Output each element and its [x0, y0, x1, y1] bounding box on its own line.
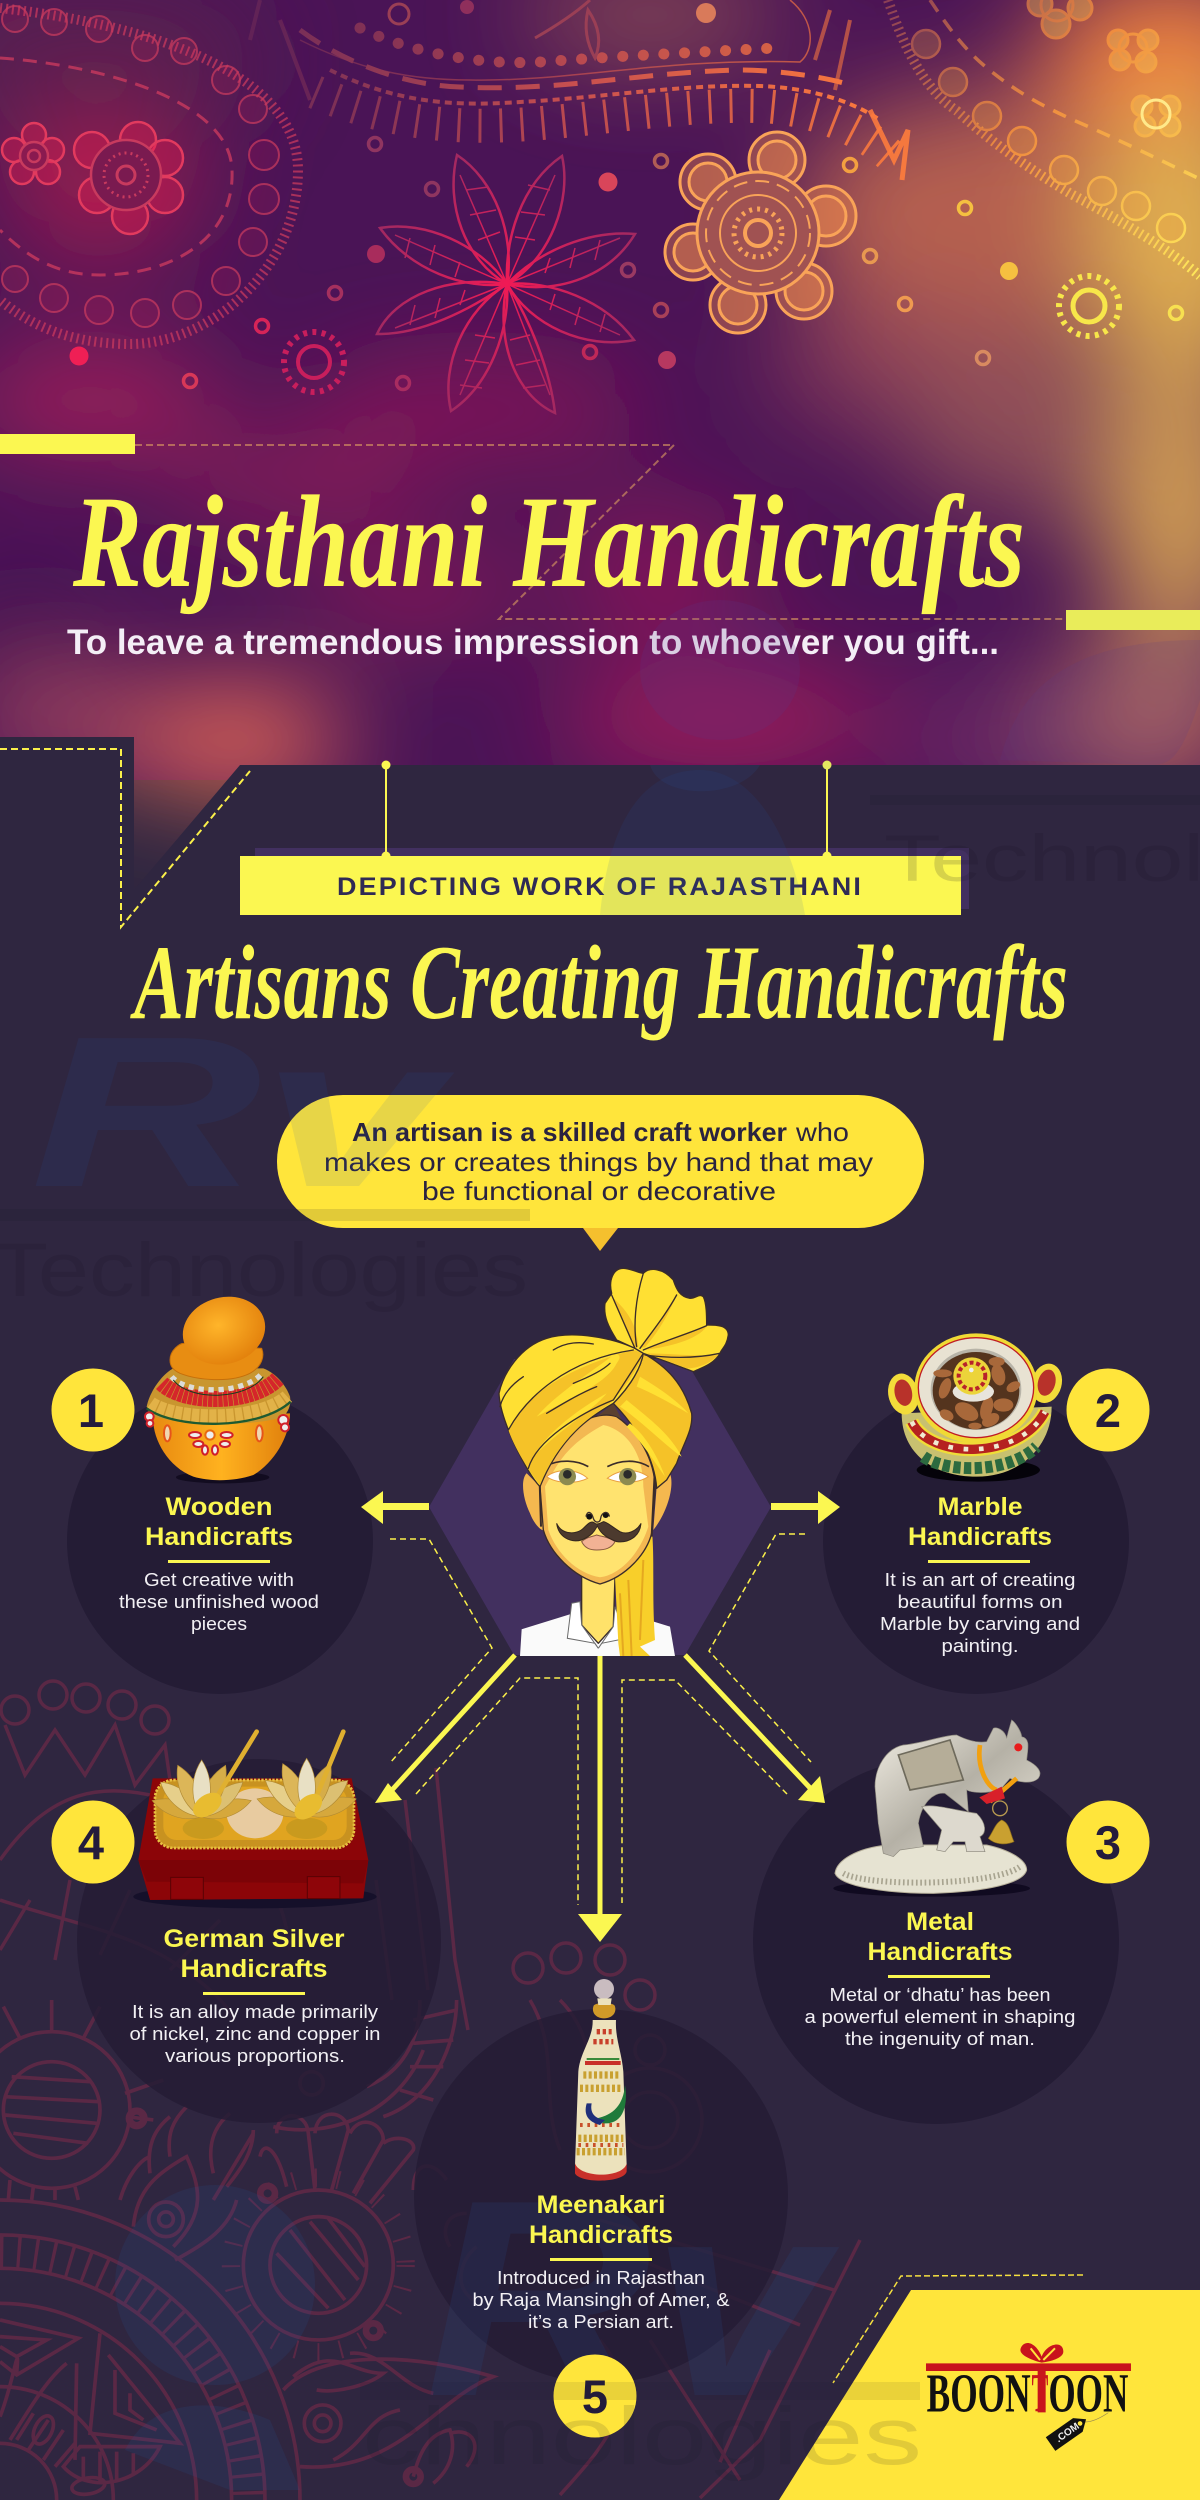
card: german silver handicrafts [130, 1925, 380, 2066]
gold tray [155, 1780, 354, 1848]
description: various proportions. [165, 2046, 345, 2066]
red tilak [1014, 1743, 1022, 1751]
green line [147, 1402, 291, 1424]
heading: Handicrafts [180, 1955, 328, 1983]
card: metal handicrafts [804, 1908, 1076, 2049]
dashed title frame [135, 445, 1066, 619]
number badge 1: 1 [78, 1384, 104, 1437]
red box [138, 1778, 368, 1900]
shirt [520, 1613, 675, 1656]
coil folds [620, 1377, 688, 1477]
number badge 5 [554, 2354, 636, 2438]
dashed panel corner [0, 749, 250, 927]
left handle [884, 1371, 922, 1417]
watermark: logos and text: Technologies [0, 1228, 528, 1313]
gold collar [593, 2003, 615, 2018]
description: by Raja Mansingh of Amer, & [472, 2290, 730, 2310]
artisan figure [499, 1268, 728, 1656]
watermark: logos and text: Technol [884, 821, 1200, 895]
product: marble pot [884, 1333, 1066, 1482]
watermark: logos and text: Rv [30, 991, 456, 1232]
lower floral band [923, 1447, 1037, 1468]
left spoon [188, 1732, 257, 1822]
arrow: lower right [685, 1655, 825, 1803]
icon: orange flower [665, 132, 856, 333]
hair [597, 1403, 622, 1419]
description: a powerful element in shaping [804, 2007, 1076, 2027]
knot lines [612, 1273, 720, 1357]
tag string [1082, 2413, 1108, 2422]
number badge 4: 4 [78, 1816, 104, 1869]
almonds [933, 1352, 1022, 1430]
icon: yellow ring [1059, 276, 1119, 336]
jewels [145, 1412, 289, 1455]
heading: Handicrafts [908, 1523, 1052, 1551]
moustache [557, 1522, 641, 1542]
ear right [653, 1473, 671, 1530]
left lotus bowl [150, 1760, 254, 1824]
turban knot [605, 1268, 728, 1372]
garland [979, 1745, 1017, 1802]
description: It is an art of creating [884, 1570, 1076, 1590]
bell ring [993, 1801, 1007, 1816]
neck [582, 1577, 615, 1643]
description: the ingenuity of man. [845, 2029, 1035, 2049]
rim [170, 1343, 263, 1380]
bubble text word: who [795, 1117, 849, 1147]
hexagon behind artisan [429, 1359, 771, 1655]
knob [953, 1382, 994, 1402]
panel circle: metal [753, 1758, 1119, 2124]
number badge 4 [52, 1800, 134, 1884]
description: Get creative with [144, 1570, 294, 1590]
description: of nickel, zinc and copper in [130, 2024, 380, 2044]
gift ribbon [926, 2363, 1131, 2412]
body [575, 2020, 627, 2176]
body [902, 1407, 1052, 1477]
heading: Metal [906, 1908, 974, 1936]
bubble tail [583, 1228, 618, 1251]
dashed connector lines [390, 1534, 811, 1905]
gold collar [147, 1368, 290, 1424]
gold ribs [151, 1397, 287, 1416]
base band [575, 2163, 627, 2181]
turban right coil [613, 1353, 692, 1488]
watermark on logo panel: chnologies [362, 2391, 922, 2482]
logo panel [779, 2290, 1200, 2500]
sideburns [539, 1467, 655, 1537]
heading: Wooden [166, 1493, 272, 1521]
peacock body [586, 2103, 605, 2125]
ear left [523, 1473, 543, 1530]
number badge 1 [52, 1368, 134, 1452]
dome fold lines [500, 1343, 643, 1468]
title bar right [1066, 610, 1200, 630]
header background gradient [0, 0, 1200, 800]
bowl lid [175, 1288, 273, 1374]
description: Marble by carving and [880, 1614, 1080, 1634]
bell [988, 1820, 1014, 1844]
arrow: lower left [375, 1655, 515, 1803]
arrow: down [578, 1655, 622, 1942]
lips [582, 1535, 615, 1550]
heading: Meenakari [536, 2191, 666, 2219]
description: Introduced in Rajasthan [497, 2268, 705, 2288]
watermark: mandala lower part [0, 2000, 493, 2500]
heading: Handicrafts [145, 1523, 293, 1551]
bubble text: An artisan is a skilled craft worker [352, 1117, 787, 1147]
red band [162, 1378, 278, 1399]
card: wooden handicrafts [119, 1493, 319, 1634]
knot shading [612, 1296, 718, 1368]
decoration: small rings and dots [70, 0, 1182, 390]
right spoon [290, 1732, 343, 1825]
collar [567, 1602, 627, 1648]
dome shading [508, 1350, 643, 1485]
price tag: .COM [1054, 2421, 1082, 2445]
red band [912, 1412, 1045, 1449]
title bar left [0, 434, 135, 454]
red ribbon [979, 1787, 1005, 1804]
description: beautiful forms on [898, 1592, 1062, 1612]
description: It is an alloy made primarily [132, 2002, 378, 2022]
number badge 2: 2 [1095, 1384, 1121, 1437]
peacock tail [597, 2085, 626, 2123]
product: silver cow [833, 1720, 1040, 1897]
turban dome [499, 1335, 643, 1487]
bowl stems [183, 1818, 224, 1839]
eye right [607, 1461, 649, 1485]
cow body [875, 1720, 1040, 1857]
number badge 2 [1066, 1368, 1150, 1452]
arrow: right [771, 1491, 840, 1524]
left handle decoration [892, 1378, 915, 1408]
tail folds [620, 1560, 643, 1656]
right handle decoration [1035, 1368, 1058, 1398]
eye left [546, 1461, 588, 1485]
bubble text line two: makes or creates things by hand that may [324, 1147, 873, 1177]
stopper [594, 1979, 614, 1999]
face [540, 1415, 655, 1584]
logo: boontoon [926, 2343, 1131, 2451]
subtitle: To leave a tremendous impression to whoever you gift... [67, 623, 999, 662]
panel circle: marble [823, 1388, 1129, 1694]
pot body [153, 1413, 290, 1480]
product: meenakari bottle [575, 1979, 627, 2181]
dark content panel [0, 737, 1200, 2500]
description: painting. [942, 1636, 1018, 1656]
right handle [1027, 1360, 1066, 1407]
card: marble handicrafts [880, 1493, 1080, 1656]
arrow: left [361, 1491, 429, 1524]
banner text: DEPICTING WORK OF RAJASTHANI [337, 873, 863, 901]
banner shadow [255, 848, 969, 909]
watermark: logos and text: Rv [425, 2143, 842, 2455]
banner hanging pins [382, 760, 832, 860]
heading: German Silver [164, 1925, 345, 1953]
calf [922, 1806, 985, 1852]
banner [240, 856, 961, 915]
saddle [898, 1740, 963, 1790]
bubble text line three: be functional or decorative [422, 1176, 776, 1206]
description: Metal or ‘dhatu’ has been [830, 1985, 1050, 2005]
face highlight [545, 1425, 648, 1577]
dome highlights [533, 1355, 620, 1457]
heading: Handicrafts [868, 1938, 1012, 1966]
rim [914, 1333, 1038, 1443]
decoration: top leaf shapes [389, 0, 599, 58]
logo: boontoon: BOON [927, 2363, 1031, 2424]
number badge 3 [1066, 1800, 1150, 1884]
white beads [172, 1372, 263, 1390]
heading: Marble [938, 1493, 1023, 1521]
speech bubble [277, 1095, 924, 1251]
price tag [1046, 2412, 1091, 2451]
description: pieces [191, 1614, 247, 1634]
watermark: logos and text [0, 600, 1200, 2490]
icon: pink ring [284, 332, 344, 392]
panel circle: meenakari [414, 2009, 788, 2383]
decoration: right paisley [888, 0, 1200, 276]
description: it’s a Persian art. [528, 2312, 674, 2332]
decoration: left paisley [0, 6, 298, 344]
product: clay pot with bowl [145, 1288, 291, 1483]
card: meenakari handicrafts [472, 2191, 730, 2332]
description: these unfinished wood [119, 1592, 319, 1612]
heading: Handicrafts [529, 2221, 673, 2249]
right lotus bowl [255, 1758, 359, 1823]
number badge 3: 3 [1095, 1816, 1121, 1869]
decoration: top paisley band [250, 0, 908, 180]
watermark: mandala upper part [0, 1681, 860, 2498]
turban tail [615, 1527, 655, 1656]
base [835, 1845, 1027, 1893]
number badge 5: 5 [582, 2370, 608, 2423]
panel circle: wooden [67, 1388, 373, 1694]
nose [586, 1512, 609, 1522]
icon: leaf flower [377, 155, 635, 413]
dashed logo panel frame [833, 2275, 1083, 2383]
gift bow [1020, 2343, 1063, 2363]
watermark on logo panel [360, 2382, 922, 2482]
pattern [577, 2032, 625, 2152]
logo: boontoon: T [1032, 2363, 1048, 2424]
product: german silver tray set [133, 1732, 377, 1908]
logo: boontoon: OON [1048, 2363, 1128, 2424]
panel circle: german silver [77, 1759, 441, 2123]
